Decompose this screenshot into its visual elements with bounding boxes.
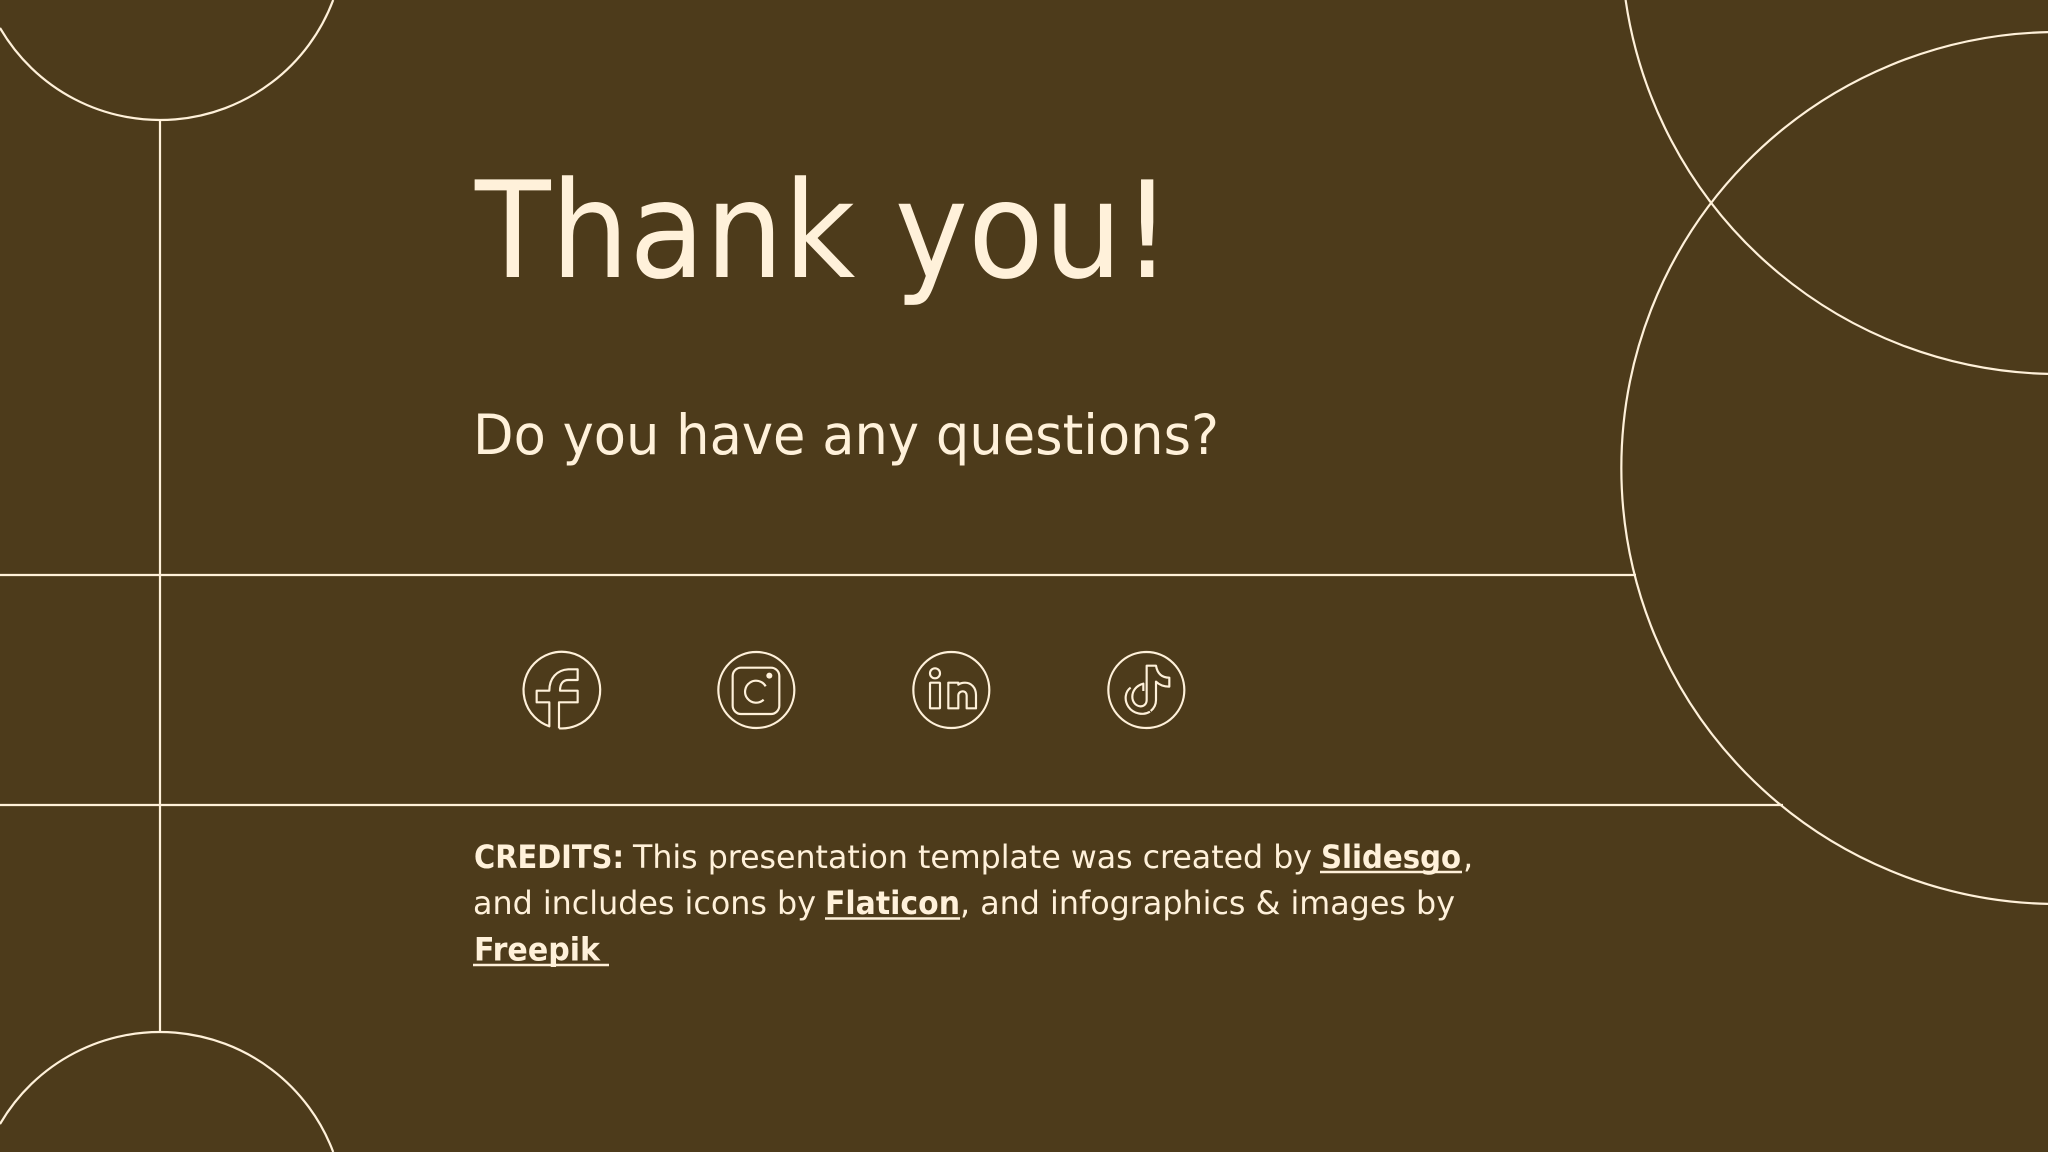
- credits text: , and infographics & images by: [960, 884, 1455, 922]
- icon: instagram: [718, 652, 794, 728]
- title: Thank you!: [474, 153, 1172, 309]
- icon: facebook: [524, 652, 600, 728]
- credits text: ,: [1463, 838, 1473, 876]
- credits text: This presentation template was created by: [632, 838, 1312, 876]
- icon: linkedin: [913, 652, 989, 728]
- credits text: Flaticon: [825, 884, 960, 922]
- social icons: [524, 652, 1184, 728]
- icon: tiktok: [1108, 652, 1184, 728]
- subtitle: Do you have any questions?: [473, 403, 1219, 467]
- credits text: [473, 838, 1473, 968]
- credits text: CREDITS:: [474, 838, 624, 876]
- credits text: Slidesgo: [1321, 838, 1461, 876]
- credits text: Freepik: [474, 930, 601, 968]
- credits text: and includes icons by: [473, 884, 816, 922]
